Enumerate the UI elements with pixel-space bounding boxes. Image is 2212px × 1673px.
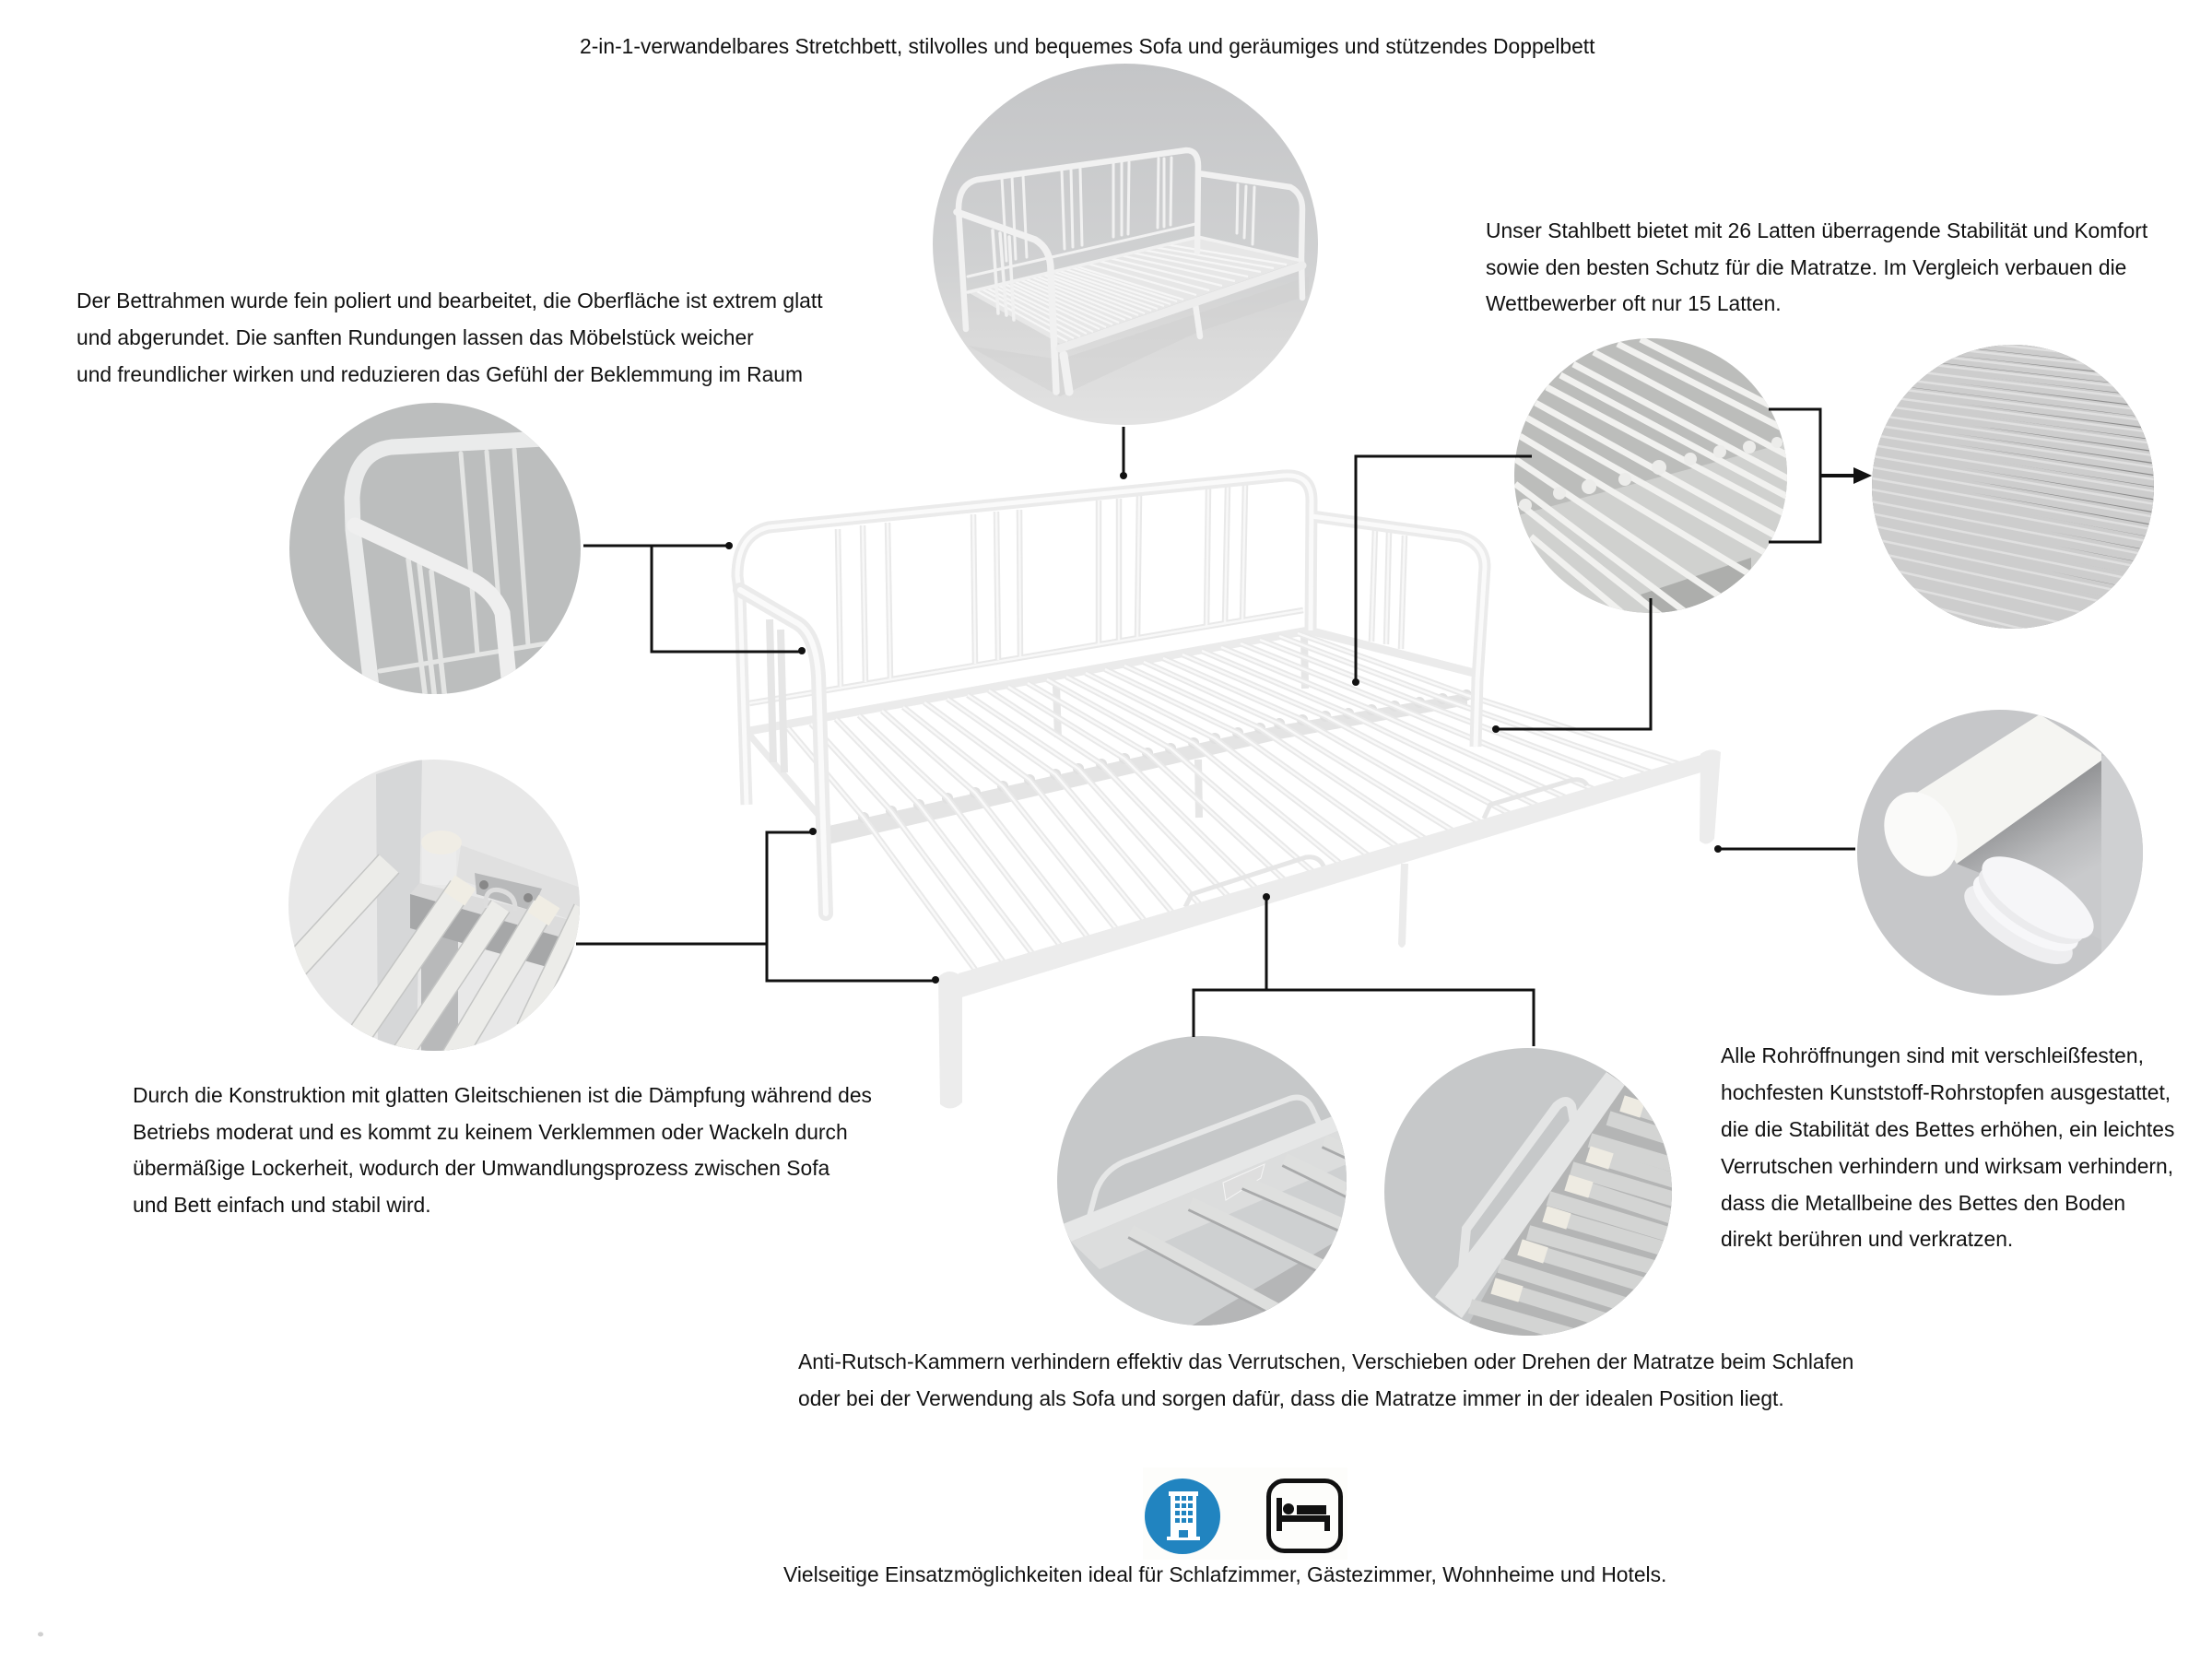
text: slats: Unser Stahlbett bietet mit 26 Latten überragende Stabilität und Komfort [1486, 218, 2148, 242]
front right foot [1700, 749, 1721, 844]
bracket connecting slat circles [1769, 409, 1820, 542]
rear frame beams [749, 630, 1481, 731]
arrow to slat comparison [1820, 467, 1872, 484]
photo circle: slats closeup [1514, 338, 1787, 613]
small watermark dot [38, 1632, 43, 1637]
leader: sofa view [1120, 427, 1127, 479]
text: plugs: die die Stabilität des Bettes erhöhen, ein leichtes [1721, 1117, 2174, 1141]
leader: slats upper [1352, 456, 1532, 686]
photo circle: sofa overview [933, 64, 1318, 425]
text: anti-slip: Anti-Rutsch-Kammern verhindern effektiv das Verrutschen, Verschieben oder Drehen der Matratze beim Schlafen [798, 1349, 1853, 1373]
main bed illustration [737, 476, 1721, 1109]
photo circle: sliding rail joint [288, 759, 582, 1060]
icon: hotel building [1143, 1467, 1347, 1560]
slats [788, 633, 1678, 977]
text: plugs: hochfesten Kunststoff-Rohrstopfen ausgestattet, [1721, 1080, 2171, 1104]
text: anti-slip: oder bei der Verwendung als Sofa und sorgen dafür, dass die Matratze immer in der idealen Position liegt. [798, 1386, 1784, 1410]
photo circle: plastic tube plugs [1857, 710, 2143, 996]
text: plugs: Alle Rohröffnungen sind mit verschleißfesten, [1721, 1043, 2144, 1067]
text: slats [1486, 218, 2148, 315]
text: sliding rails [133, 1083, 872, 1217]
leader: plug [1714, 845, 1855, 853]
front beam [959, 751, 1716, 998]
leader: sliding rails [576, 828, 939, 984]
text: sliding rails: Durch die Konstruktion mit glatten Gleitschienen ist die Dämpfung während des [133, 1083, 872, 1107]
text: plugs: dass die Metallbeine des Bettes den Boden [1721, 1191, 2125, 1215]
backrest thin bars [749, 485, 1405, 703]
text: anti-slip [798, 1349, 1853, 1410]
text: sliding rails: übermäßige Lockerheit, wodurch der Umwandlungsprozess zwischen Sofa [133, 1156, 830, 1180]
text: slats: Wettbewerber oft nur 15 Latten. [1486, 291, 1782, 315]
photo circle: anti-slip bar top view [1384, 1048, 1672, 1336]
frame tubes, backrest and side arm [737, 476, 1485, 805]
text: sliding rails: und Bett einfach und stabil wird. [133, 1193, 431, 1217]
front left foot [938, 972, 962, 1109]
photo circle: steel slats dense [1872, 345, 2154, 629]
leader: slats lower [1492, 598, 1651, 733]
photo circle: rounded frame corner [289, 403, 581, 701]
side rail [744, 728, 829, 827]
leader: anti-slip bars [1194, 893, 1534, 1046]
icon: bed [1268, 1480, 1340, 1550]
rear legs under frame [1056, 634, 1477, 818]
text: usage: Vielseitige Einsatzmöglichkeiten ideal für Schlafzimmer, Gästezimmer, Wohnheime und Hotels. [783, 1562, 1666, 1586]
middle support beam [829, 693, 1467, 844]
center leg [1398, 864, 1408, 948]
text: plugs: direkt berühren und verkratzen. [1721, 1227, 2013, 1251]
anti-slip handles [1185, 780, 1587, 907]
text: frame finish: Der Bettrahmen wurde fein poliert und bearbeitet, die Oberfläche ist extrem glatt [76, 289, 823, 312]
text: sliding rails: Betriebs moderat und es kommt zu keinem Verklemmen oder Wackeln durch [133, 1120, 848, 1144]
text: frame finish [76, 289, 823, 386]
title: 2-in-1-verwandelbares Stretchbett, stilvolles und bequemes Sofa und geräumiges und stützendes Doppelbett [580, 34, 1595, 58]
text: frame finish: und abgerundet. Die sanften Rundungen lassen das Möbelstück weicher [76, 325, 754, 349]
text: frame finish: und freundlicher wirken und reduzieren das Gefühl der Beklemmung im Raum [76, 362, 803, 386]
leader lines with dots [576, 409, 1872, 1046]
leader: rounded frame [583, 542, 806, 654]
text: slats: sowie den besten Schutz für die Matratze. Im Vergleich verbauen die [1486, 255, 2126, 279]
left arm tube [740, 590, 826, 913]
text: plugs: Verrutschen verhindern und wirksam verhindern, [1721, 1154, 2173, 1178]
left arm bars [770, 619, 784, 772]
photo circle: anti-slip bar front view [1057, 1036, 1350, 1327]
text: plugs [1721, 1043, 2174, 1251]
